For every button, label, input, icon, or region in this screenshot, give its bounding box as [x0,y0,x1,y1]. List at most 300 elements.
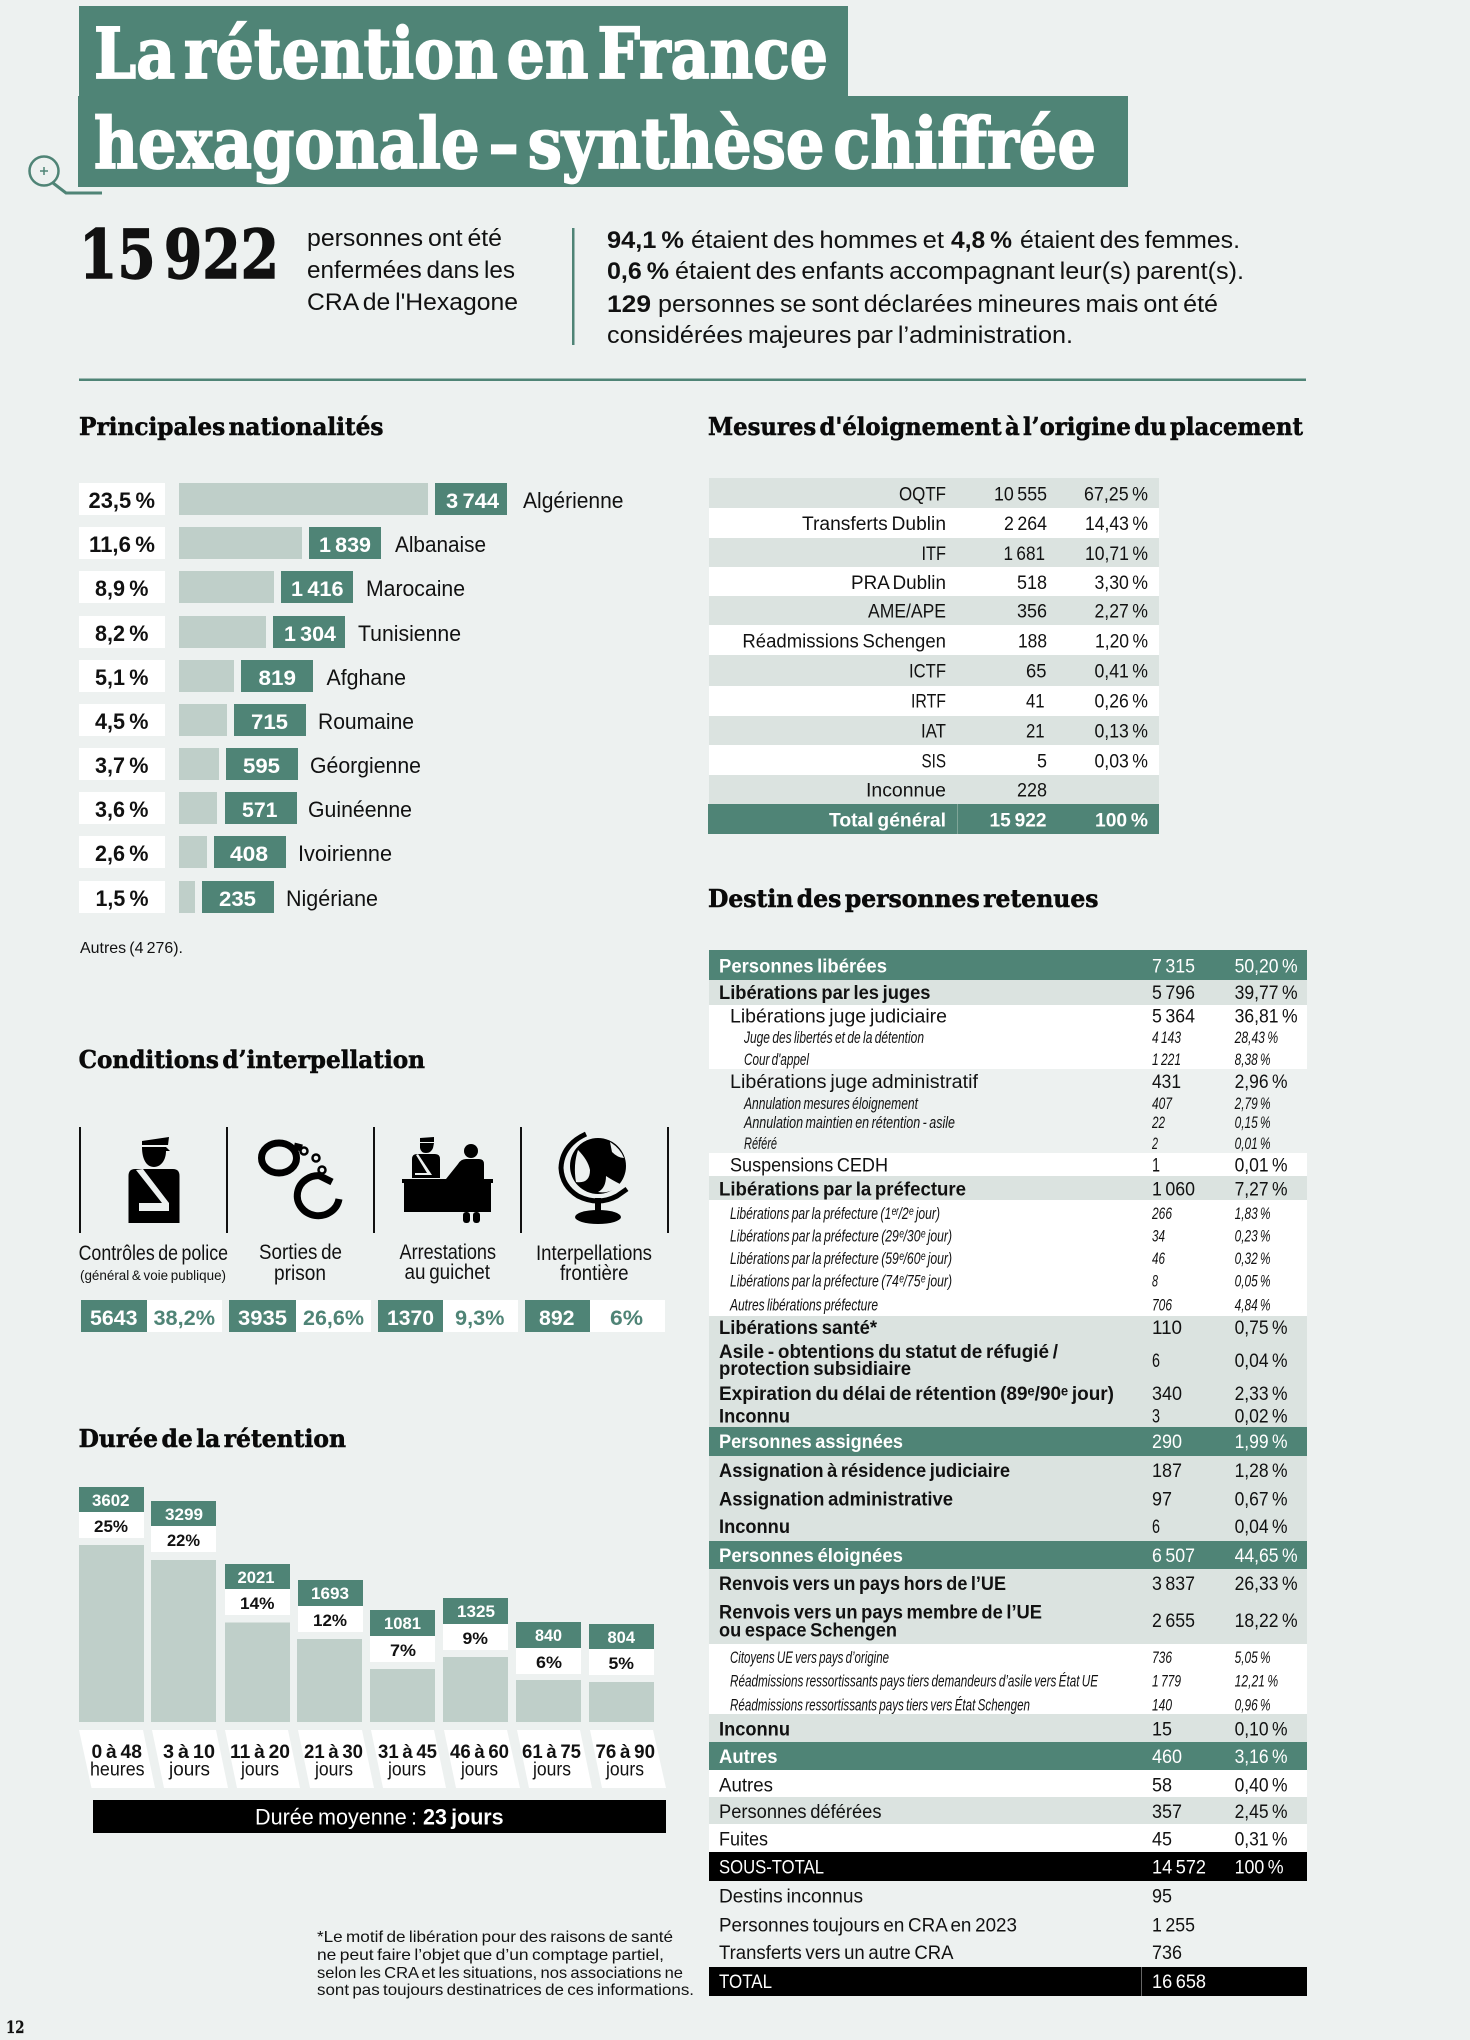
title [78,6,1128,187]
section: personnes libérées: Annulation mesures éloignement [743,1094,919,1113]
bar: Tunisienne: 8,2 % [95,621,148,646]
bar: 11 à 20 jours [225,1564,290,1722]
row: sous-total: 100 % [1235,1858,1284,1879]
section: personnes assignées: 6 [1152,1517,1160,1538]
bar: Algérienne: 23,5 % [88,488,155,513]
section: personnes assignées: 1,28 % [1235,1461,1288,1482]
section: personnes libérées: 431 [1152,1072,1181,1093]
table: mesures: 356 [1017,602,1047,623]
stat: arrestations au guichet [378,1300,518,1332]
section: personnes éloignées: 3 837 [1152,1574,1195,1595]
section: personnes éloignées: Renvois vers un pays membre de l’UE [719,1603,1042,1624]
text block: demographics [607,227,1244,349]
label: 61 à 75 jours: 61 à 75 [522,1742,581,1763]
section: personnes libérées: Libérations par la préfecture (1ᵉʳ/2ᵉ jour) [730,1204,940,1223]
table: mesures: 3,30 % [1094,573,1148,594]
section: personnes libérées: Libérations par la préfecture [719,1180,966,1201]
section: personnes éloignées: 5,05 % [1235,1648,1271,1667]
section: personnes assignées: 0,67 % [1235,1490,1288,1511]
section: personnes libérées: 1 221 [1152,1050,1181,1069]
panel: durée de la rétention [79,1424,666,1833]
label: 76 à 90 jours: 76 à 90 [596,1742,655,1763]
section: personnes libérées: Libérations par la préfecture (59ᵉ/60ᵉ jour) [730,1249,952,1268]
bar: 3 à 10 jours [151,1501,216,1722]
bar: Tunisienne [79,616,461,648]
label: sorties de prison: prison [274,1262,326,1285]
row: sous-total: SOUS-TOTAL [719,1858,824,1879]
footnote: sont pas toujours destinatrices de ces informations. [317,1982,694,1999]
section: personnes libérées: Juge des libertés et de la détention [743,1028,924,1047]
section: personnes libérées: 4 143 [1152,1028,1181,1047]
section: autres: Fuites [719,1830,768,1851]
bar: Guinéenne: 3,6 % [95,797,148,822]
text block: demographics: personnes se sont déclarées mineures mais ont été [658,291,1218,318]
table: mesures: 41 [1026,692,1045,713]
section: personnes libérées: Libérations par les juges [719,983,930,1004]
section: personnes libérées: 7 315 [1152,956,1195,977]
bar: Algérienne: Algérienne [523,488,624,513]
label: arrestations au guichet: Arrestations [400,1241,496,1264]
section: personnes libérées: 0,01 % [1235,1156,1288,1177]
section: personnes libérées: Autres libérations préfecture [729,1296,878,1315]
label: 3 à 10 jours: jours [168,1760,210,1780]
section: personnes libérées: 5 364 [1152,1007,1195,1028]
section: personnes libérées: Libérations juge administratif [730,1072,979,1093]
label: sorties de prison [259,1241,342,1285]
label: interpellations frontière [536,1242,652,1285]
rows: hors sous-total: Transferts vers un autre CRA [719,1943,954,1964]
table: mesures: 67,25 % [1084,485,1148,506]
section: personnes libérées: 2,33 % [1235,1384,1288,1405]
bar: 0 à 48 heures [79,1487,144,1722]
section: autres: 0,40 % [1235,1776,1288,1797]
section: personnes libérées: Personnes libérées [719,956,887,977]
section: personnes éloignées: 6 507 [1152,1546,1195,1567]
section: personnes éloignées: Réadmissions ressortissants pays tiers demandeurs d’asile vers État UE [730,1672,1098,1691]
panel: conditions d'interpellation [79,1045,669,1332]
label: arrestations au guichet [400,1241,496,1284]
section: personnes éloignées: 0,10 % [1235,1720,1288,1741]
bar: Marocaine: 8,9 % [95,576,148,601]
table: mesures: OQTF [899,485,946,506]
section: personnes éloignées: Réadmissions ressortissants pays tiers vers État Schengen [730,1696,1030,1715]
section: personnes libérées: Annulation maintien en rétention - asile [743,1113,955,1132]
section: personnes libérées: Suspensions CEDH [730,1156,888,1177]
label: 21 à 30 jours [298,1730,374,1788]
stat: interpellations frontière [525,1300,665,1332]
table: mesures [708,478,1159,834]
bar: Nigériane [79,881,378,913]
rows: hors sous-total: 1 255 [1152,1916,1195,1937]
bar: Algérienne: 3 744 [446,490,499,513]
label: 11 à 20 jours: 11 à 20 [230,1742,290,1763]
section: personnes éloignées: 44,65 % [1235,1546,1298,1567]
bar: Géorgienne: Géorgienne [310,753,421,778]
row: total [719,1972,1206,1993]
section: personnes libérées: 34 [1152,1227,1165,1246]
stat: contrôles de police: 5643 [90,1307,138,1330]
table: mesures: 2 264 [1004,514,1047,535]
section: autres: 58 [1152,1776,1172,1797]
section: personnes libérées: 0,04 % [1235,1351,1288,1372]
table: mesures: SIS [922,752,946,773]
text block: demographics: considérées majeures par l’administration. [607,322,1073,349]
stat: contrôles de police [81,1300,222,1332]
rows: hors sous-total [719,1887,1195,1964]
bar: 0 à 48 heures: 25% [94,1517,128,1536]
label: 0 à 48 heures [79,1730,155,1788]
section: personnes libérées: 2,79 % [1234,1094,1271,1113]
section: personnes assignées: Assignation à résidence judiciaire [719,1461,1010,1482]
section: personnes libérées: 340 [1152,1384,1182,1405]
bar: 3 à 10 jours: 3299 [165,1505,203,1524]
bar: 76 à 90 jours: 804 [608,1628,636,1647]
table: mesures: 0,26 % [1094,692,1148,713]
page number: 12 [6,2018,24,2038]
section: personnes libérées: 0,23 % [1235,1227,1271,1246]
key figure: 15 922 [79,215,279,294]
bar: 31 à 45 jours: 1081 [384,1614,421,1633]
label: arrestations au guichet: au guichet [404,1261,490,1284]
section: personnes libérées: 706 [1152,1296,1172,1315]
section: personnes éloignées: 736 [1152,1648,1172,1667]
footnote: ne peut faire l’objet que d’un comptage partiel, [317,1947,664,1964]
section: personnes libérées: 1 060 [1152,1180,1195,1201]
bar: Géorgienne: 3,7 % [95,753,148,778]
section: autres [719,1747,1288,1851]
section: personnes assignées: 290 [1152,1432,1182,1453]
footnote: selon les CRA et les situations, nos associations ne [317,1965,683,1982]
label: 11 à 20 jours [225,1730,300,1788]
bar: Géorgienne [79,748,421,780]
section: personnes libérées: 0,32 % [1235,1249,1271,1268]
section: personnes libérées: Inconnu [719,1407,790,1428]
bar: Guinéenne [79,792,412,824]
table: mesures: 21 [1026,722,1045,743]
section: personnes libérées: 7,27 % [1235,1180,1288,1201]
stat: arrestations au guichet: 9,3% [455,1307,505,1330]
section: personnes éloignées: Personnes éloignées [719,1546,903,1567]
section: personnes assignées: 187 [1152,1461,1182,1482]
text block: demographics: étaient des enfants accompagnant leur(s) parent(s). [675,258,1244,285]
section: personnes libérées: 1,83 % [1235,1204,1271,1223]
table: mesures: Réadmissions Schengen [742,632,946,653]
table: mesures: 10,71 % [1085,544,1148,565]
panel: principales nationalités [79,412,624,957]
table: mesures: 1 681 [1004,544,1045,565]
bar: Nigériane: 1,5 % [96,886,148,911]
section: personnes assignées: Personnes assignées [719,1432,903,1453]
section: personnes libérées: 5 796 [1152,983,1195,1004]
table: mesures: Transferts Dublin [802,514,946,535]
bar: Albanaise [79,527,486,559]
heading: conditions: Conditions d’interpellation [79,1045,425,1074]
section: personnes éloignées: 15 [1152,1720,1172,1741]
section: personnes libérées: 22 [1151,1113,1165,1132]
section: personnes assignées: Assignation administrative [719,1490,953,1511]
heading: nationalités: Principales nationalités [79,412,384,441]
label: 46 à 60 jours: jours [460,1760,498,1780]
table: mesures: 65 [1026,662,1046,683]
table: mesures: ICTF [909,662,946,683]
label: 11 à 20 jours: jours [240,1760,279,1780]
section: personnes libérées: 0,05 % [1235,1272,1271,1291]
row: total: 16 658 [1152,1972,1206,1993]
section: personnes libérées: Référé [744,1134,777,1153]
bar: Géorgienne: 595 [243,755,280,778]
table: mesures: 0,03 % [1094,752,1148,773]
bar: Roumaine: Roumaine [318,709,414,734]
bar: 21 à 30 jours: 1693 [311,1584,349,1603]
table: mesures: 14,43 % [1085,514,1148,535]
section: personnes éloignées: Citoyens UE vers pays d’origine [730,1648,889,1667]
label: 46 à 60 jours: 46 à 60 [450,1742,509,1763]
table: mesures: 100 % [1095,811,1148,832]
bar: 11 à 20 jours: 14% [240,1594,274,1613]
icon: police officer [128,1137,180,1223]
text block: demographics: 129 [607,291,651,318]
section: autres: Autres [719,1747,778,1768]
bar: Marocaine [79,571,465,603]
table: mesures: 5 [1037,752,1047,773]
table: mesures: Inconnue [866,781,946,802]
bar: 61 à 75 jours [516,1622,581,1722]
footnote [317,1929,694,1999]
bar: 31 à 45 jours [370,1610,435,1722]
label: 21 à 30 jours: jours [314,1760,353,1780]
section: personnes libérées: 0,02 % [1235,1407,1288,1428]
label: 21 à 30 jours: 21 à 30 [304,1742,363,1763]
section: personnes libérées: Cour d'appel [744,1050,810,1069]
text block: demographics: 4,8 % [951,227,1012,254]
bar: Albanaise: 11,6 % [89,532,155,557]
table: mesures: 0,41 % [1094,662,1148,683]
table: mesures: ITF [922,544,946,565]
icon: magnifying glass [30,156,102,193]
callout: durée moyenne: 23 jours [423,1804,504,1830]
callout: durée moyenne [93,1800,666,1833]
bar: Afghane: 819 [258,667,296,690]
text block: demographics: étaient des femmes. [1020,227,1240,254]
bar: Ivoirienne: 2,6 % [95,841,148,866]
bar: 21 à 30 jours: 12% [313,1611,347,1630]
bar: 0 à 48 heures: 3602 [92,1491,130,1510]
section: personnes libérées: 8,38 % [1235,1050,1271,1069]
section: personnes libérées: 8 [1152,1272,1158,1291]
section: personnes éloignées: ou espace Schengen [719,1621,897,1642]
bar: Afghane [79,660,406,692]
section: personnes éloignées [719,1546,1298,1741]
section: autres: 2,45 % [1235,1802,1288,1823]
rows: hors sous-total: 95 [1152,1887,1172,1908]
section: personnes assignées: 97 [1152,1490,1172,1511]
key figure: CRA de l'Hexagone [307,289,518,316]
stat: interpellations frontière: 892 [539,1307,574,1330]
label: 0 à 48 heures: 0 à 48 [92,1742,142,1763]
section: autres: Autres [719,1776,773,1797]
text block: demographics: 94,1 % [607,227,684,254]
heading: destin: Destin des personnes retenues [708,884,1098,913]
row: sous-total: 14 572 [1152,1858,1206,1879]
bar: 3 à 10 jours: 22% [167,1531,200,1550]
bar: Afghane: 5,1 % [95,665,148,690]
bar: Albanaise: Albanaise [395,532,486,557]
label: sorties de prison: Sorties de [259,1241,342,1264]
section: personnes libérées: 6 [1152,1351,1160,1372]
bar: 61 à 75 jours: 840 [535,1626,562,1645]
label: 76 à 90 jours: jours [605,1760,644,1780]
label: 61 à 75 jours [517,1730,592,1788]
panel: destin des personnes retenues [708,884,1307,1996]
panel: mesures d'éloignement [708,412,1303,834]
table: mesures: 0,13 % [1094,722,1148,743]
section: personnes éloignées: 18,22 % [1235,1611,1298,1632]
bar: 46 à 60 jours: 9% [462,1629,488,1648]
bar: 11 à 20 jours: 2021 [238,1568,274,1587]
section: personnes libérées: 4,84 % [1235,1296,1271,1315]
label: contrôles de police: (général & voie publique) [80,1267,226,1283]
table: mesures: 15 922 [990,811,1046,832]
label: 61 à 75 jours: jours [532,1760,571,1780]
section: personnes éloignées: Renvois vers un pays hors de l’UE [719,1574,1006,1595]
table background bands [709,950,1307,1996]
bar: Guinéenne: Guinéenne [308,797,412,822]
section: personnes éloignées: 26,33 % [1235,1574,1298,1595]
label: 76 à 90 jours [590,1730,666,1788]
section: personnes libérées: 46 [1152,1249,1165,1268]
bar: Guinéenne: 571 [242,799,278,822]
section: autres: Personnes déférées [719,1802,882,1823]
note: autres: Autres (4 276). [80,940,183,957]
section: personnes libérées: 50,20 % [1235,956,1298,977]
bar: Roumaine: 4,5 % [95,709,148,734]
label: 31 à 45 jours: jours [387,1760,426,1780]
stat: contrôles de police: 38,2% [154,1307,215,1330]
table: mesures: 228 [1017,781,1047,802]
section: personnes libérées: Libérations juge judiciaire [730,1007,947,1028]
section: personnes libérées: 407 [1152,1094,1172,1113]
section: personnes libérées: Expiration du délai de rétention (89ᵉ/90ᵉ jour) [719,1384,1114,1405]
section: autres: 460 [1152,1747,1182,1768]
label: interpellations frontière: Interpellations [536,1242,652,1265]
bar: Marocaine: Marocaine [366,576,465,601]
section: personnes libérées [719,956,1298,1428]
stat: arrestations au guichet: 1370 [387,1307,434,1330]
heading: mesures: Mesures d'éloignement à l’origine du placement [708,412,1303,441]
section: personnes libérées: 0,75 % [1235,1318,1288,1339]
bar: Ivoirienne: 408 [230,843,268,866]
bar: Nigériane: Nigériane [286,886,378,911]
stat: sorties de prison: 3935 [238,1307,287,1330]
section: personnes libérées: 36,81 % [1235,1007,1298,1028]
text block: demographics: 0,6 % [607,258,669,285]
table: mesures: Total général [829,811,946,832]
table: mesures: IRTF [911,692,946,713]
row: total: TOTAL [719,1972,772,1993]
section: personnes éloignées: 12,21 % [1235,1672,1278,1691]
section: personnes éloignées: 1 779 [1152,1672,1181,1691]
bar: Albanaise: 1 839 [319,534,371,557]
label: 3 à 10 jours [152,1730,228,1788]
section: personnes libérées: Libérations par la préfecture (29ᵉ/30ᵉ jour) [730,1227,952,1246]
text block: demographics: étaient des hommes et [691,227,944,254]
section: personnes libérées: 110 [1152,1318,1182,1339]
icon: police desk [402,1137,493,1223]
section: personnes assignées [719,1432,1288,1538]
bar: 76 à 90 jours [589,1624,654,1722]
table: mesures: 2,27 % [1094,602,1148,623]
key figure: personnes ont été [307,225,502,252]
bar: Roumaine: 715 [251,711,288,734]
section: personnes libérées: 1 [1152,1156,1160,1177]
table: mesures: 188 [1018,632,1047,653]
title: hexagonale – synthèse chiffrée [94,102,1096,185]
row: sous-total [719,1858,1284,1879]
bar: Ivoirienne: Ivoirienne [298,841,392,866]
table: mesures: IAT [921,722,946,743]
section: autres: 0,31 % [1235,1830,1288,1851]
section: personnes libérées: Libérations par la préfecture (74ᵉ/75ᵉ jour) [730,1272,952,1291]
table: mesures: AME/APE [868,602,946,623]
section: personnes libérées: 39,77 % [1235,983,1298,1004]
bar: 76 à 90 jours: 5% [608,1654,634,1673]
label: 31 à 45 jours [371,1730,446,1788]
table: mesures: 518 [1017,573,1047,594]
stat: sorties de prison: 26,6% [303,1307,364,1330]
bar: 31 à 45 jours: 7% [390,1641,416,1660]
bar: Roumaine [79,704,414,736]
section: personnes libérées: 2,96 % [1235,1072,1288,1093]
key figure: enfermées dans les [307,257,515,284]
bar: Tunisienne: 1 304 [284,623,336,646]
stat: sorties de prison [229,1300,371,1332]
bar: Afghane: Afghane [326,665,406,690]
bar: 46 à 60 jours [443,1598,508,1722]
bar: Algérienne [79,483,624,515]
section: personnes libérées: 2 [1151,1134,1158,1153]
rows: hors sous-total: Personnes toujours en CRA en 2023 [719,1916,1017,1937]
bar: 46 à 60 jours: 1325 [457,1602,495,1621]
bar: Ivoirienne [79,836,392,868]
section: autres: 45 [1152,1830,1172,1851]
icon: handcuffs [262,1143,339,1216]
footnote: *Le motif de libération pour des raisons de santé [317,1929,673,1946]
table: mesures: 1,20 % [1095,632,1148,653]
section: personnes libérées: Libérations santé* [719,1318,878,1339]
section: personnes éloignées: 0,96 % [1235,1696,1271,1715]
section: personnes assignées: 0,04 % [1235,1517,1288,1538]
section: autres: 357 [1152,1802,1182,1823]
stat: interpellations frontière: 6% [610,1307,643,1330]
bar: 21 à 30 jours [297,1580,363,1722]
label: interpellations frontière: frontière [560,1262,628,1285]
bar: Marocaine: 1 416 [291,578,344,601]
title: La rétention en France [94,12,828,95]
icon: globe [561,1134,627,1224]
heading: durée: Durée de la rétention [79,1424,346,1453]
label: 0 à 48 heures: heures [90,1760,145,1780]
section: personnes assignées: 1,99 % [1235,1432,1288,1453]
section: personnes libérées: 0,01 % [1235,1134,1271,1153]
section: autres: 3,16 % [1235,1747,1288,1768]
key figure [79,215,518,316]
section: personnes libérées: 3 [1152,1407,1160,1428]
bar: Tunisienne: Tunisienne [358,621,461,646]
label: 31 à 45 jours: 31 à 45 [378,1742,437,1763]
section: personnes libérées: 28,43 % [1234,1028,1278,1047]
rows: hors sous-total: 736 [1152,1943,1182,1964]
label: contrôles de police [79,1242,228,1283]
